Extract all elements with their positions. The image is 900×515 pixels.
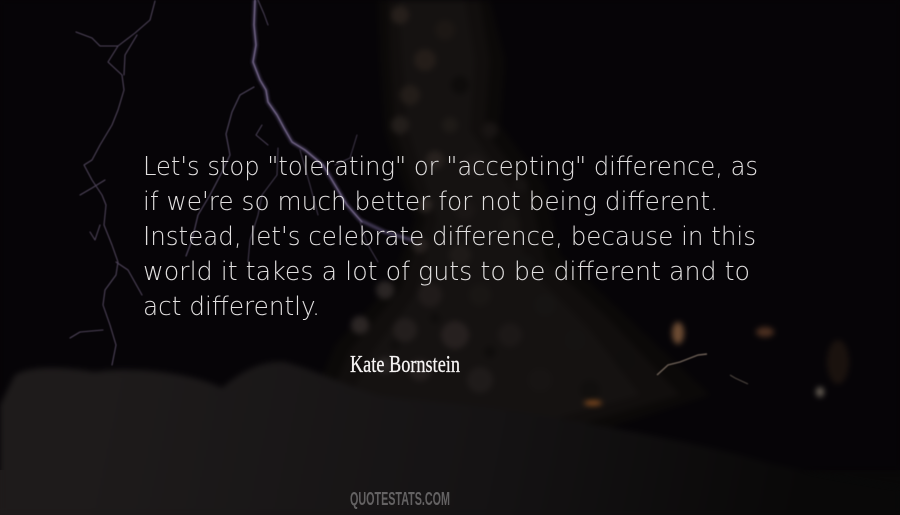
fire glows	[584, 322, 849, 406]
quote line 5: act differently.	[143, 292, 320, 322]
lightning: left bolt	[70, 1, 155, 365]
ground: snowy cloud bank	[0, 362, 900, 515]
lightning: main bolt	[253, 0, 412, 240]
quote line 1: Let's stop "tolerating" or "accepting" difference, as	[143, 152, 758, 182]
quote line 2: if we're so much better for not being different.	[143, 187, 718, 217]
author name: Kate Bornstein	[350, 352, 460, 378]
ash cloud column	[300, 0, 710, 440]
fire sparks	[657, 354, 748, 384]
ground base layer	[0, 470, 900, 515]
quote text	[143, 152, 758, 322]
quote line 4: world it takes a lot of guts to be different and to	[143, 257, 750, 287]
lightning bolts	[70, 0, 412, 365]
quote line 3: Instead, let's celebrate difference, because in this	[143, 222, 756, 252]
ash cloud texture	[351, 6, 635, 400]
lightning: centre branch	[186, 87, 254, 256]
source watermark: QUOTESTATS.COM	[350, 489, 450, 509]
